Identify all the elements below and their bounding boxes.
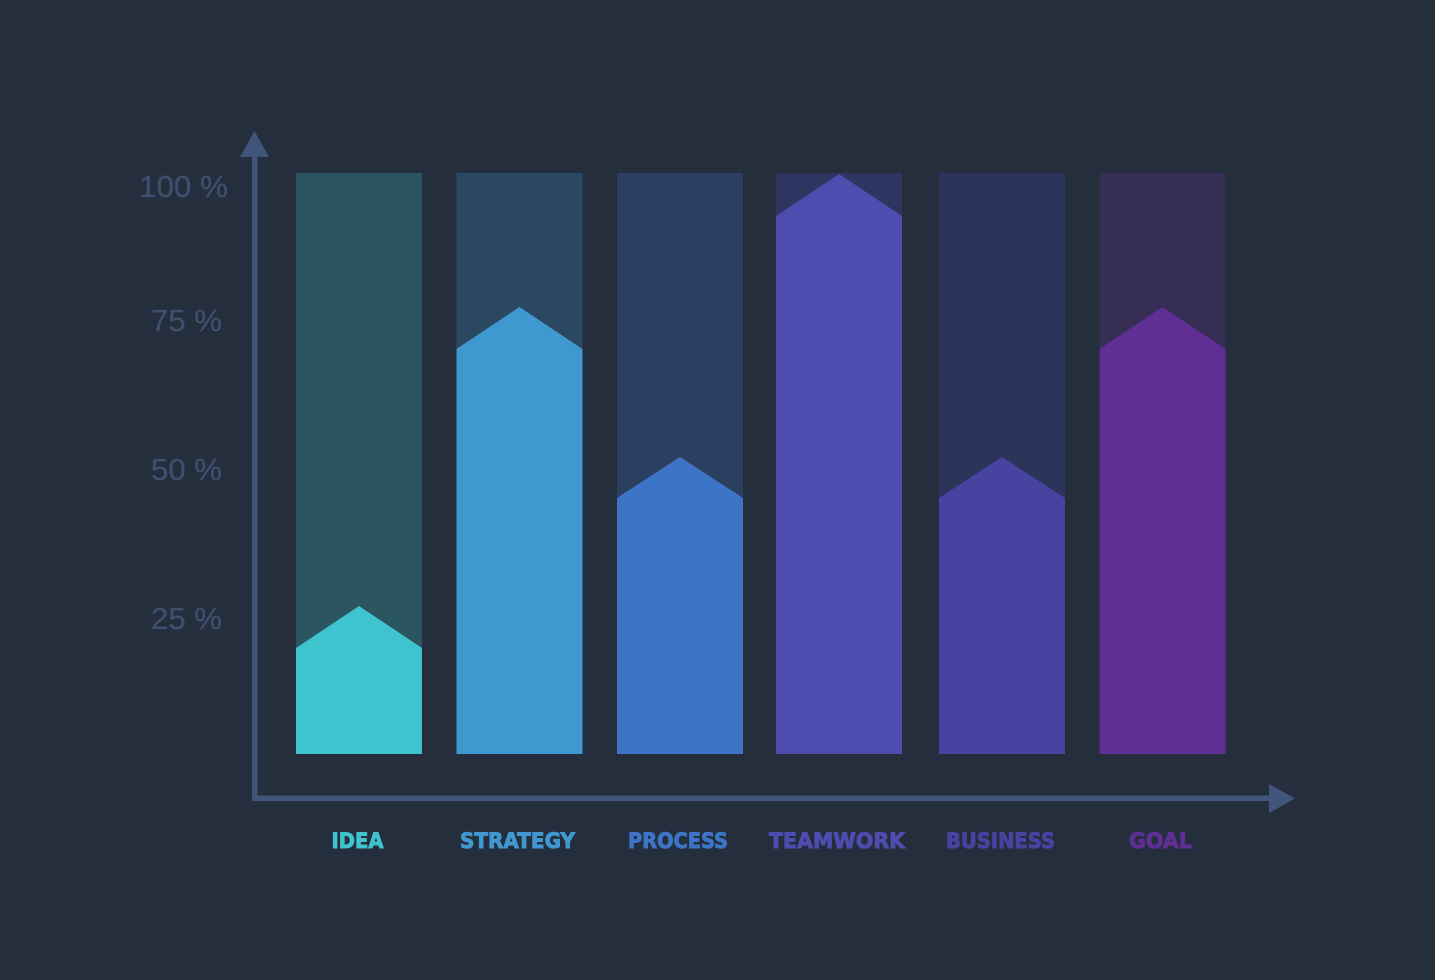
- bar: goal: [1100, 173, 1226, 754]
- x axis labels: BUSINESS: [946, 829, 1055, 853]
- y axis labels: [139, 169, 228, 636]
- bar: process: [617, 173, 743, 754]
- y axis arrow: [240, 131, 269, 801]
- y axis labels: 50 %: [151, 452, 222, 487]
- x axis labels: GOAL: [1129, 829, 1192, 853]
- x axis labels: IDEA: [332, 829, 384, 853]
- x axis labels: [332, 829, 1192, 853]
- bar: business: [939, 173, 1065, 754]
- x axis arrow: [252, 784, 1295, 813]
- y axis labels: 100 %: [139, 169, 228, 204]
- bar: strategy: [456, 173, 582, 754]
- bar: idea: [296, 173, 422, 754]
- x axis labels: PROCESS: [628, 829, 728, 853]
- x axis labels: TEAMWORK: [769, 829, 906, 853]
- y axis labels: 25 %: [151, 601, 222, 636]
- bar: teamwork: [776, 173, 902, 754]
- y axis labels: 75 %: [151, 303, 222, 338]
- x axis labels: STRATEGY: [460, 829, 576, 853]
